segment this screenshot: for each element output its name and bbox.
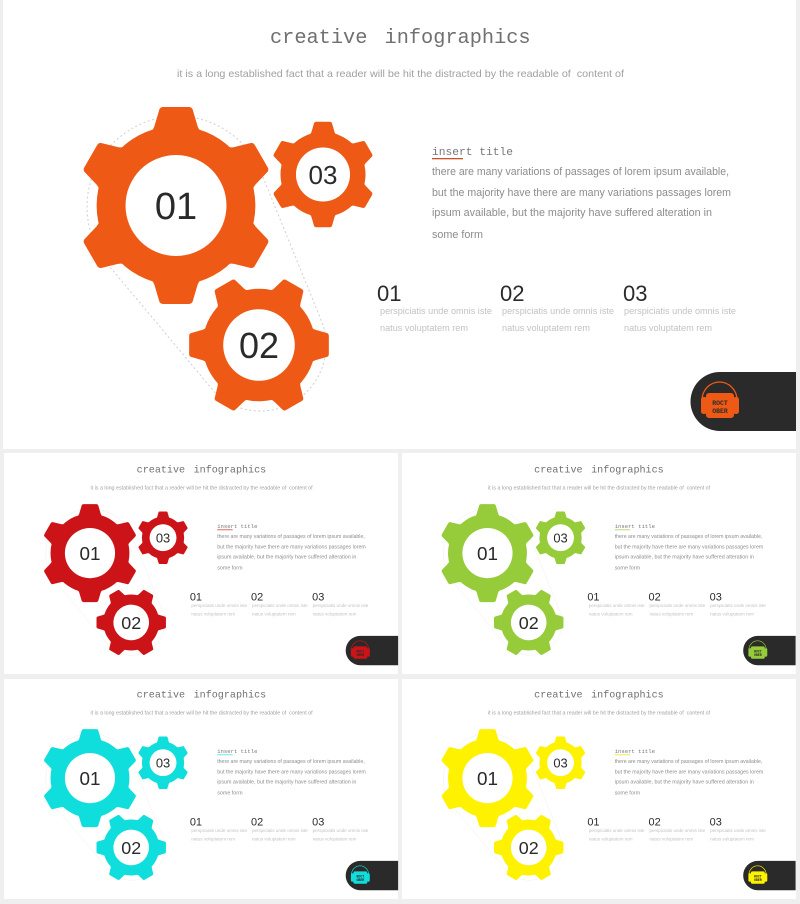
item 01: natus voluptatem rem [191,837,235,843]
panel: green slide [402,453,796,674]
item 03: perspiciatis unde omnis iste [710,828,766,834]
text block: insert title: some form [615,790,640,796]
text block: insert title: there are many variations of passages of lorem ipsum available, [615,759,763,765]
panel: yellow slide [402,679,796,899]
item 03: perspiciatis unde omnis iste [710,603,766,609]
text block: insert title [615,523,764,571]
dotted outline around gears [46,734,165,880]
text block: insert title [432,147,731,241]
gear 01 [439,504,536,602]
item 03: 03 [710,817,722,829]
gear 02 [84,800,178,895]
gear 02: 02 [519,613,539,633]
text block: insert title: there are many variations of passages of lorem ipsum available, [217,534,365,540]
subtitle: it is a long established fact that a reader will be hit the distracted by the readable of content of [90,485,313,491]
gear 03: 03 [156,530,170,545]
text block: insert title: insert title [217,523,257,530]
item 01: perspiciatis unde omnis iste [380,306,492,317]
item 02: natus voluptatem rem [252,612,296,618]
text block: insert title: insert title [615,523,655,530]
item 02 [251,817,308,843]
text block: insert title: but the majority have there are many variations passages lorem [217,769,366,775]
badge with headphones icon [690,372,796,431]
text block: insert title: but the majority have there are many variations passages lorem [615,769,764,775]
item 02: perspiciatis unde omnis iste [252,828,308,834]
text block: insert title: ipsum available, but the majority have suffered alteration in [615,779,754,785]
badge with headphones icon: OBER [754,878,762,882]
badge with headphones icon: ROCT [356,649,364,653]
text block: insert title: insert title [615,748,655,755]
text block: insert title: some form [217,790,243,796]
badge with headphones icon: OBER [712,408,728,415]
item 01: natus voluptatem rem [589,837,633,843]
item 01: perspiciatis unde omnis iste [589,603,645,609]
item 03 [623,281,736,334]
item 03 [312,592,369,618]
gear 03 [535,737,587,789]
panel: main orange slide [3,0,796,449]
item 03: natus voluptatem rem [710,837,754,843]
subtitle: it is a long established fact that a reader will be hit the distracted by the readable of content of [90,710,313,716]
gear 02 [482,575,576,670]
item 02: natus voluptatem rem [502,323,590,334]
badge with headphones icon: ROCT [754,649,762,653]
gear 03 [137,512,189,564]
item 01: 01 [587,592,600,604]
item 01: 01 [587,817,600,829]
gear 01: 01 [477,769,498,790]
gear 01: 01 [79,769,100,790]
item 02 [500,281,614,334]
badge with headphones icon [743,861,796,890]
item 02: 02 [648,592,661,604]
badge with headphones icon: OBER [356,878,364,882]
dotted outline around gears [46,509,165,655]
item 01: perspiciatis unde omnis iste [191,828,247,834]
gear 02 [482,800,576,895]
text block: insert title: insert title [217,748,257,755]
item 03: 03 [623,281,647,306]
gear 02 [84,575,178,670]
text block: insert title: ipsum available, but the majority have suffered alteration in [217,779,356,785]
badge with headphones icon: ROCT [754,874,762,878]
item 03: perspiciatis unde omnis iste [313,603,369,609]
item 02: 02 [251,817,263,829]
dotted outline around gears [443,509,562,655]
badge with headphones icon [346,636,398,665]
item 02: natus voluptatem rem [649,837,693,843]
item 01: 01 [377,281,401,306]
subtitle: it is a long established fact that a reader will be hit the distracted by the readable of content of [177,68,624,80]
item 03: 03 [312,592,324,604]
text block: insert title: some form [615,565,640,571]
item 02: 02 [251,592,263,604]
text block: insert title [217,748,366,796]
text block: insert title: but the majority have there are many variations passages lorem [615,544,764,550]
gear 02: 02 [519,838,539,858]
dotted outline around gears [87,116,326,411]
gear 02: 02 [121,838,141,858]
item 01: perspiciatis unde omnis iste [191,603,247,609]
text block: insert title: some form [217,565,243,571]
text block: insert title: insert title [432,147,513,159]
text block: insert title: ipsum available, but the majority have suffered alteration in [432,207,712,219]
text block: insert title: but the majority have there are many variations passages lorem [432,187,731,199]
item 03 [710,592,766,618]
gear 02: 02 [239,325,279,366]
item 02: perspiciatis unde omnis iste [252,603,308,609]
title: creative infographics [137,464,266,476]
gear 01 [41,729,138,827]
title: creative infographics [534,689,664,701]
gear 01: 01 [79,544,100,565]
text block: insert title: but the majority have there are many variations passages lorem [217,544,366,550]
text block: insert title: ipsum available, but the majority have suffered alteration in [217,554,356,560]
text block: insert title [615,748,764,796]
gear 03: 03 [156,755,170,770]
item 03: 03 [710,592,722,604]
gear 01: 01 [477,544,498,565]
item 02: natus voluptatem rem [252,837,296,843]
gear 01 [439,729,536,827]
gear 01: 01 [155,186,197,228]
gear 03 [535,512,587,564]
item 01 [587,817,645,843]
item 01: 01 [190,592,202,604]
item 03: natus voluptatem rem [710,612,754,618]
item 02: natus voluptatem rem [649,612,693,618]
item 01 [587,592,645,618]
item 03: 03 [312,817,324,829]
title: creative infographics [137,689,266,701]
dotted outline around gears [443,734,562,880]
item 03 [312,817,369,843]
gear 01 [78,107,274,304]
badge with headphones icon: OBER [356,653,364,657]
item 03: natus voluptatem rem [313,837,356,843]
badge with headphones icon [743,636,796,665]
item 02: perspiciatis unde omnis iste [649,603,706,609]
text block: insert title: there are many variations of passages of lorem ipsum available, [217,759,365,765]
item 03 [710,817,766,843]
item 01: 01 [190,817,202,829]
gear 03 [271,122,375,227]
item 02 [251,592,308,618]
item 03: natus voluptatem rem [313,612,356,618]
subtitle: it is a long established fact that a reader will be hit the distracted by the readable of content of [488,485,711,491]
panel: red slide [4,453,398,674]
item 02: perspiciatis unde omnis iste [649,828,706,834]
badge with headphones icon: OBER [754,653,762,657]
item 01: natus voluptatem rem [380,323,468,334]
item 02 [648,817,706,843]
item 01 [190,592,247,618]
item 01 [377,281,492,334]
gear 02 [164,250,354,440]
gear 01 [41,504,138,602]
panel: cyan slide [4,679,398,899]
gear 03 [137,737,189,789]
item 03: perspiciatis unde omnis iste [313,828,369,834]
item 02 [648,592,706,618]
item 01: perspiciatis unde omnis iste [589,828,645,834]
text block: insert title: some form [432,229,483,241]
item 02: perspiciatis unde omnis iste [502,306,614,317]
title: creative infographics [534,464,664,476]
item 02: 02 [648,817,661,829]
subtitle: it is a long established fact that a reader will be hit the distracted by the readable of content of [488,710,711,716]
gear 03: 03 [553,755,568,770]
item 01 [190,817,247,843]
badge with headphones icon: ROCT [712,400,728,407]
item 03: perspiciatis unde omnis iste [624,306,736,317]
gear 03: 03 [309,160,337,190]
item 01: natus voluptatem rem [589,612,633,618]
text block: insert title: there are many variations of passages of lorem ipsum available, [432,166,729,178]
item 02: 02 [500,281,524,306]
item 03: natus voluptatem rem [624,323,712,334]
text block: insert title: there are many variations of passages of lorem ipsum available, [615,534,763,540]
badge with headphones icon [346,861,398,890]
badge with headphones icon: ROCT [356,874,364,878]
text block: insert title: ipsum available, but the majority have suffered alteration in [615,554,754,560]
text block: insert title [217,523,366,571]
item 01: natus voluptatem rem [191,612,235,618]
title: creative infographics [270,27,531,50]
gear 02: 02 [121,613,141,633]
gear 03: 03 [553,530,568,545]
